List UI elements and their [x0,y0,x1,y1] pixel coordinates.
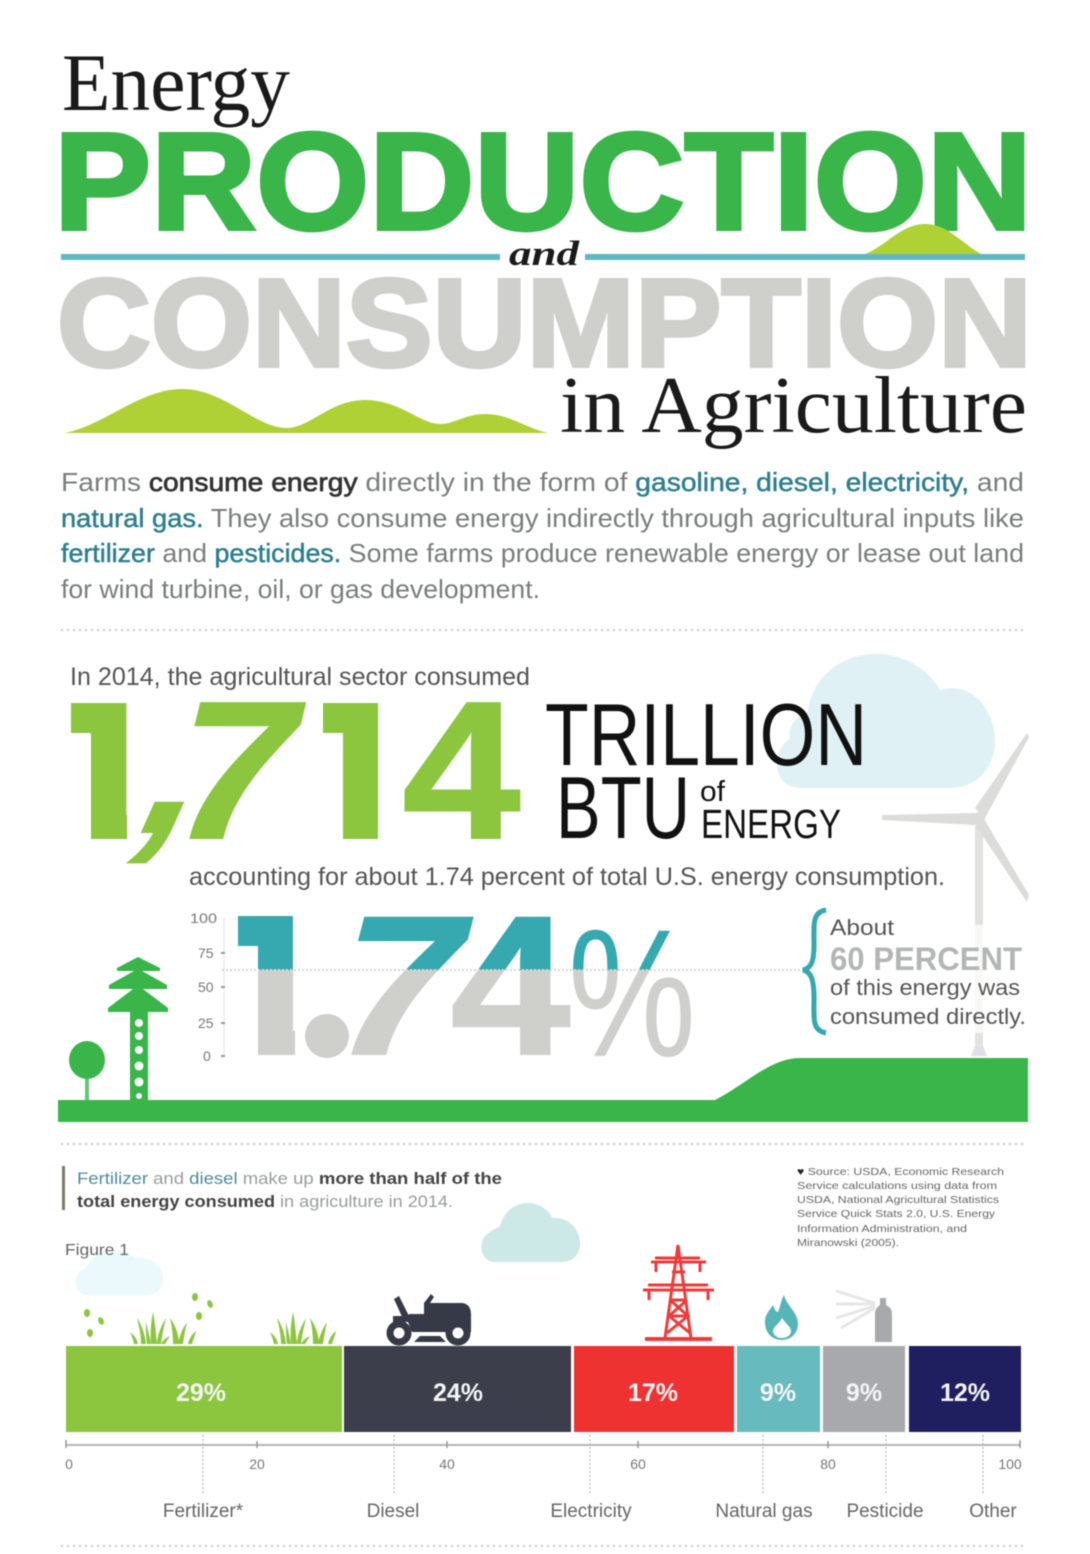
bar values: 24% [433,1379,483,1407]
bar values: 9% [846,1379,882,1407]
source note: Service calculations using data from [797,1180,997,1192]
title line: CONSUMPTION: CONSUMPTION [57,254,1032,393]
ground [58,1058,1028,1122]
title line: PRODUCTION: PRODUCTION [54,105,1032,259]
bar values: 17% [628,1379,678,1407]
icon: green pylon [108,957,168,1100]
bar values: 9% [760,1379,796,1407]
source note: Service Quick Stats 2.0, U.S. Energy [797,1208,996,1220]
section heading: Fertilizer and diesel make up more than half of the [77,1169,502,1188]
title line: Energy: Energy [62,37,290,128]
bar values: 12% [940,1379,990,1407]
intro paragraph: natural gas. They also consume energy indirectly through agricultural inputs like [61,503,1024,533]
green hills [65,389,548,433]
big percent: 1.74%: 4 [450,875,570,1096]
bar: fertilizer [66,1346,342,1432]
figure label: Figure 1 [65,1242,129,1259]
big number: 1,714 [70,701,522,864]
big number: 1,714: 4 [402,661,520,880]
bar values: 29% [176,1379,226,1407]
category labels: Natural gas [715,1501,813,1522]
callout: 60 percent: of this energy was [830,975,1020,1000]
unit: TRILLION BTU of ENERGY [545,685,867,857]
icon: tractor [390,1294,471,1342]
unit: TRILLION BTU of ENERGY: BTU [556,758,690,857]
icon: wind turbine [882,733,1029,1056]
source note [797,1166,1004,1249]
icon: red pylon [643,1245,714,1339]
bar: other [909,1346,1021,1432]
x axis [65,1440,1022,1472]
y axis: 75 [198,945,214,961]
y axis: 25 [198,1015,214,1031]
source note: Miranowski (2005). [797,1237,899,1249]
big number: 1,714: 1 [259,661,431,880]
accent bar [62,1166,65,1210]
big percent: 1.74%: 1 [182,875,342,1096]
big number: 1,714: , [110,655,262,874]
category labels [163,1501,1017,1522]
section heading [77,1169,502,1211]
intro paragraph: fertilizer and pesticides. Some farms produce renewable energy or lease out land [61,538,1024,568]
intro paragraph: for wind turbine, oil, or gas development. [61,574,540,604]
bar: pesticide [823,1346,905,1432]
unit: TRILLION BTU of ENERGY: ENERGY [701,801,841,847]
category labels: Fertilizer* [163,1501,244,1522]
source note: USDA, National Agricultural Statistics [797,1194,999,1206]
intro paragraph [61,467,1024,604]
stacked bar [66,1346,1021,1432]
hill on rule [860,224,986,256]
big percent: 1.74%: 7 [309,875,494,1096]
teal rule right [585,254,1025,260]
icon: gas flame [765,1295,798,1340]
callout: 60 percent: About [830,915,894,940]
icon: fertilizer grass [84,1293,336,1344]
category labels: Pesticide [846,1501,924,1522]
big number: 1,714: 7 [149,662,325,880]
big percent: 1.74%: % [568,891,696,1095]
intro paragraph: Farms consume energy directly in the form of gasoline, diesel, electricity, and [61,467,1024,497]
title line: in Agriculture: in Agriculture [560,362,1027,450]
y axis [190,910,225,1064]
bar values [176,1379,990,1407]
unit: TRILLION BTU of ENERGY: TRILLION [545,685,867,784]
icon: spray can [836,1291,892,1342]
category labels: Diesel [367,1501,419,1522]
icon: tree [69,1041,105,1100]
callout: 60 percent: 60 PERCENT [830,941,1022,977]
icon: pale cloud [76,1250,163,1295]
sentence: accounting: accounting for about 1.74 percent of total U.S. energy consumption. [189,863,945,891]
big percent: 1.74%: . [282,768,371,1126]
icon: large pale cloud [777,654,995,788]
category labels: Other [969,1501,1017,1522]
x axis: 100 [998,1456,1022,1472]
x axis: 80 [820,1456,836,1472]
y axis: 50 [198,979,214,995]
big percent: 1.74% [237,915,692,1058]
lead-in: In 2014: In 2014, the agricultural sector consumed [70,663,530,691]
source note: Information Administration, and [797,1223,967,1235]
title word: and: and [509,234,580,273]
section heading: total energy consumed in agriculture in 2014. [77,1192,453,1211]
x axis: 0 [65,1456,73,1472]
x axis: 40 [439,1456,455,1472]
bar: electricity [574,1346,734,1432]
title [54,37,1032,450]
big number: 1,714: 1 [7,661,179,880]
x axis: 20 [249,1456,265,1472]
unit: TRILLION BTU of ENERGY: of [700,776,726,808]
bar: natural gas [737,1346,820,1432]
y axis: 100 [190,910,217,926]
teal rule left [61,254,500,260]
callout: 60 percent: consumed directly. [830,1004,1026,1029]
y axis: 0 [203,1048,211,1064]
icon: teal cloud [481,1203,580,1262]
bar: diesel [344,1346,571,1432]
brace [803,910,826,1033]
category labels: Electricity [550,1501,632,1522]
source note: ♥ Source: USDA, Economic Research [797,1166,1004,1178]
callout: 60 percent [830,915,1026,1029]
x axis: 60 [630,1456,646,1472]
